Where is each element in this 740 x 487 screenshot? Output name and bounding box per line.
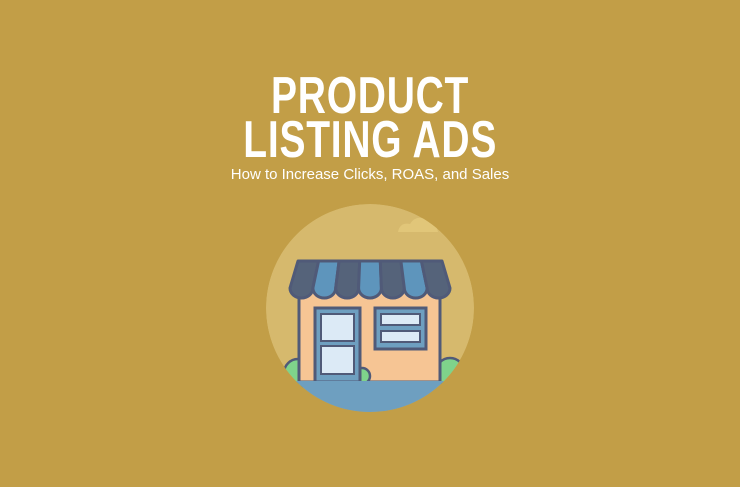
bush front [362,366,372,381]
door [315,308,360,382]
title: PRODUCT [271,67,469,125]
illustration: storefront [266,204,474,412]
wall [299,290,440,382]
bushes behind [284,358,464,388]
subtitle: How to Increase Clicks, ROAS, and Sales [231,166,509,183]
title line 2: LISTING ADS [243,111,497,169]
window [375,308,426,349]
ground [296,381,444,412]
awning [290,261,450,298]
icon: cloud [398,218,438,232]
